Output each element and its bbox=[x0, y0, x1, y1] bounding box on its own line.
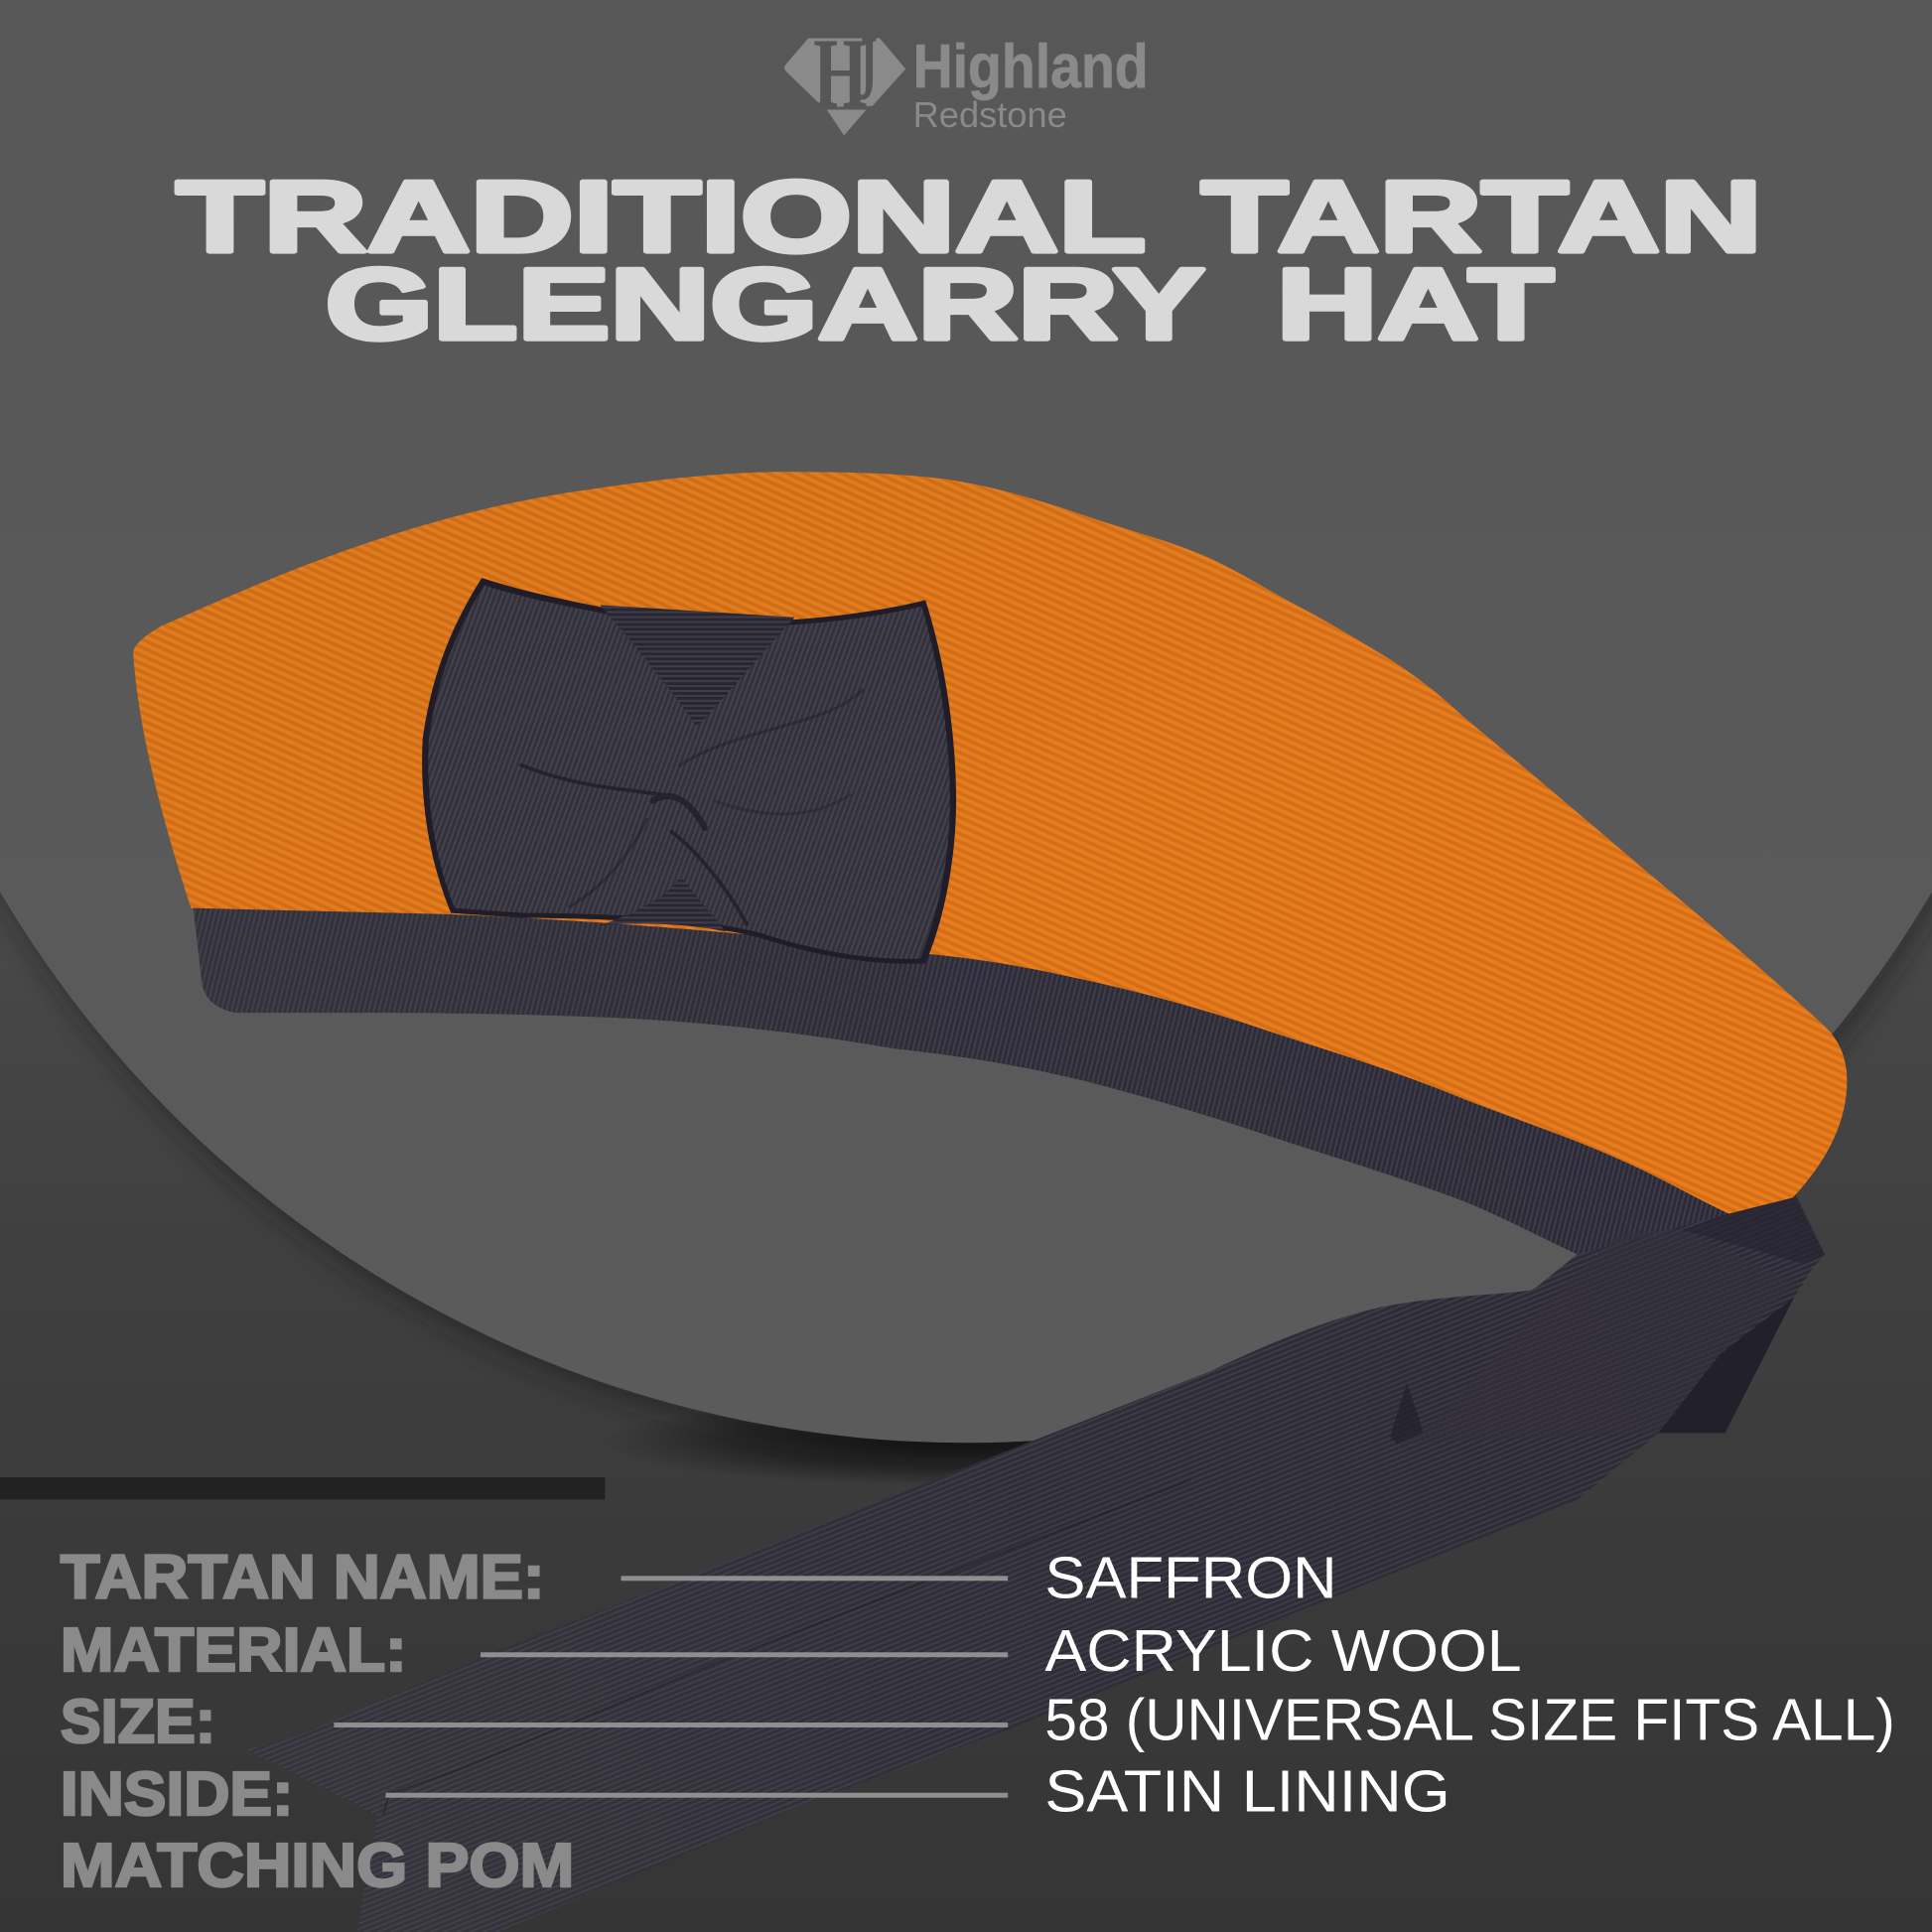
spec row: size bbox=[61, 1686, 1895, 1756]
bow top inset bbox=[600, 605, 794, 727]
spec row: inside: INSIDE: bbox=[61, 1760, 293, 1829]
logo: Highland Redstone bbox=[784, 16, 1149, 136]
logo wordmark: Highland: Highland bbox=[913, 33, 1149, 101]
title: HAT bbox=[1277, 247, 1554, 360]
title: GLENGARRY bbox=[326, 247, 1205, 360]
ribbon fold panel bbox=[1397, 1230, 1798, 1445]
icon: diamond monogram: J bbox=[855, 16, 878, 119]
icon: diamond monogram bbox=[784, 16, 905, 136]
title bbox=[176, 160, 1762, 360]
spec row: tartan name: SAFFRON bbox=[1044, 1545, 1337, 1611]
spec row: material bbox=[61, 1616, 1522, 1685]
bow bottom inset bbox=[600, 876, 726, 931]
hat bbox=[133, 472, 1847, 1932]
spec row: matching pom: MATCHING POM bbox=[61, 1832, 574, 1900]
spec list bbox=[61, 1544, 1895, 1900]
spec row: size: SIZE: bbox=[61, 1688, 215, 1756]
icon: diamond monogram: H bbox=[813, 18, 868, 130]
spec row: tartan name bbox=[61, 1544, 1337, 1612]
hat band and ribbon tail bbox=[193, 899, 1825, 1932]
spec row: size: 58 (UNIVERSAL SIZE FITS ALL) bbox=[1044, 1686, 1895, 1752]
background circle bbox=[0, 0, 1932, 1443]
black ribbon bow cockade bbox=[422, 578, 956, 964]
orange wool crown bbox=[133, 472, 1847, 1213]
dark accent bar bbox=[0, 1477, 605, 1499]
title: TARTAN bbox=[1201, 160, 1762, 273]
spec row: material: ACRYLIC WOOL bbox=[1044, 1617, 1522, 1684]
ribbon seam bbox=[383, 1480, 1191, 1815]
bow knot folds bbox=[521, 690, 863, 924]
spec row: inside bbox=[61, 1757, 1450, 1829]
title: TRADITIONAL bbox=[176, 160, 1146, 273]
logo wordmark: Redstone: Redstone bbox=[913, 94, 1067, 135]
spec row: inside: SATIN LINING bbox=[1044, 1757, 1450, 1824]
spec row: tartan name: TARTAN NAME: bbox=[61, 1544, 545, 1612]
spec row: material: MATERIAL: bbox=[61, 1616, 407, 1685]
